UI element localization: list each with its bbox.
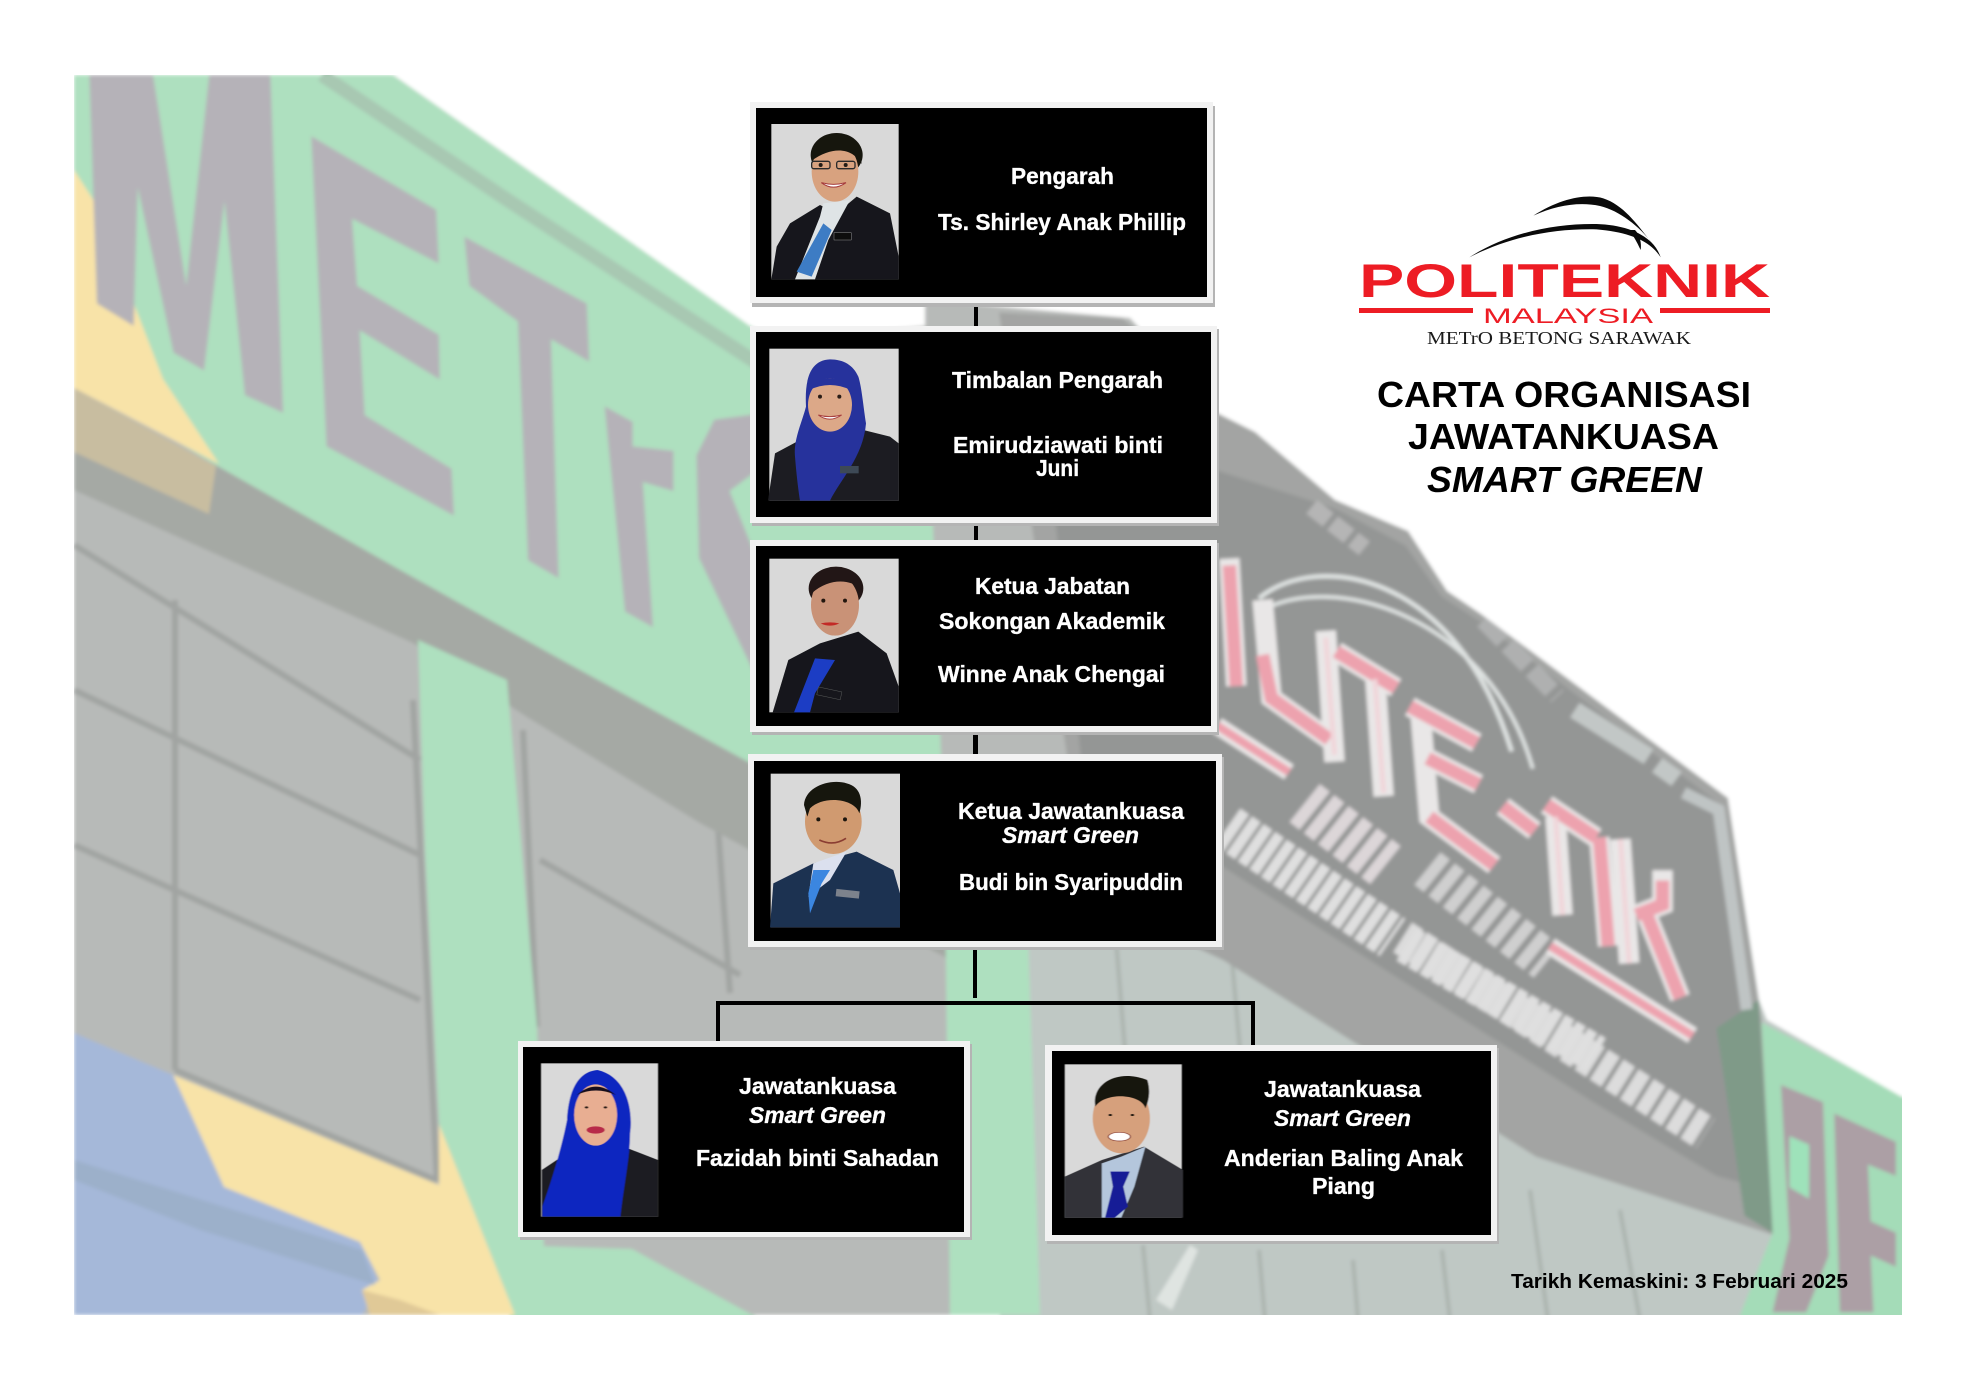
white sky area <box>372 60 1930 1097</box>
portrait: Pengarah <box>771 124 899 279</box>
METrO letters <box>89 75 765 696</box>
top dark edge of fascia <box>322 75 760 365</box>
text: Anderian: Jawatankuasa <box>1264 1076 1421 1102</box>
logo: Politeknik Malaysia: METrO BETONG SARAWAK <box>1427 328 1691 348</box>
text: Pengarah: Ts. Shirley Anak Phillip <box>938 209 1186 235</box>
blue block and yellow stripe <box>74 1033 380 1315</box>
portrait: Ketua Jawatankuasa <box>770 774 900 927</box>
text: Fazidah <box>696 1073 939 1171</box>
portrait: Ketua Jabatan <box>769 559 899 712</box>
title <box>1377 374 1751 500</box>
title: SMART GREEN <box>1427 459 1703 500</box>
green pillars <box>418 640 546 1315</box>
card: Jawatankuasa Fazidah <box>518 1041 972 1240</box>
footer: update date: Tarikh Kemaskini: 3 Februari 2025 <box>1511 1271 1848 1293</box>
text: Fazidah: Fazidah binti Sahadan <box>696 1145 939 1171</box>
text: Ketua Jabatan: Winne Anak Chengai <box>938 661 1165 687</box>
portrait: Fazidah <box>541 1063 658 1217</box>
connector: chain and branch lines <box>716 303 1255 1046</box>
text: Anderian <box>1224 1076 1463 1199</box>
logo wordmark: POLITEKNIK <box>1359 254 1770 307</box>
POLITEKNIK pink fill <box>1217 565 1692 1036</box>
POLITEKNIK white outlines <box>1217 559 1692 1036</box>
text: Ketua Jawatankuasa: Ketua Jawatankuasa <box>958 798 1184 824</box>
sign lettering <box>1217 507 1747 1054</box>
green side block with letters <box>1739 1023 1907 1318</box>
text: Fazidah: Smart Green <box>749 1102 886 1128</box>
portrait: Timbalan Pengarah <box>768 349 899 501</box>
text: Anderian: Smart Green <box>1274 1105 1411 1131</box>
text: Timbalan Pengarah: Juni <box>1036 455 1079 481</box>
text: Pengarah: Pengarah <box>1011 163 1114 189</box>
card: Jawatankuasa Anderian <box>1045 1045 1499 1244</box>
KEMENTERIAN and MALAYSIA light bands <box>1228 827 1392 937</box>
text: Timbalan Pengarah: Emirudziawati binti <box>953 432 1163 458</box>
PENGAJIAN TINGGI band <box>1403 937 1705 1133</box>
portrait: Anderian <box>1065 1064 1183 1218</box>
text: Timbalan Pengarah: Timbalan Pengarah <box>952 367 1163 393</box>
sign board <box>999 313 1907 1318</box>
text: Fazidah: Jawatankuasa <box>739 1073 896 1099</box>
text: Anderian: Anderian Baling Anak <box>1224 1145 1463 1171</box>
light bands along top edge <box>1484 621 1557 696</box>
logo: Politeknik Malaysia: MALAYSIA <box>1483 305 1653 328</box>
windows grid <box>74 545 740 1182</box>
text: Pengarah <box>938 163 1186 235</box>
text: Timbalan Pengarah <box>952 367 1163 481</box>
logo: Politeknik Malaysia <box>1359 196 1770 348</box>
text: Ketua Jabatan: Ketua Jabatan <box>975 573 1130 599</box>
text: Ketua Jawatankuasa: Smart Green <box>1002 822 1139 848</box>
card: Timbalan Pengarah <box>750 326 1219 526</box>
card: Ketua Jabatan <box>750 540 1219 735</box>
lower leaf shape <box>1156 1245 1198 1310</box>
title: JAWATANKUASA <box>1408 416 1719 457</box>
icon: logo swoosh <box>1469 196 1661 257</box>
arcs <box>1259 576 1512 751</box>
card: Pengarah <box>750 102 1215 307</box>
text: Anderian: Piang <box>1312 1173 1375 1199</box>
text: Ketua Jabatan <box>938 573 1165 687</box>
text: Ketua Jawatankuasa <box>958 798 1184 895</box>
title: CARTA ORGANISASI <box>1377 374 1751 415</box>
card: Ketua Jawatankuasa <box>748 754 1224 950</box>
text: Ketua Jabatan: Sokongan Akademik <box>939 608 1165 634</box>
text: Ketua Jawatankuasa: Budi bin Syaripuddin <box>959 869 1183 895</box>
green fascia <box>74 75 942 764</box>
yellow and tan left corner <box>74 170 219 464</box>
